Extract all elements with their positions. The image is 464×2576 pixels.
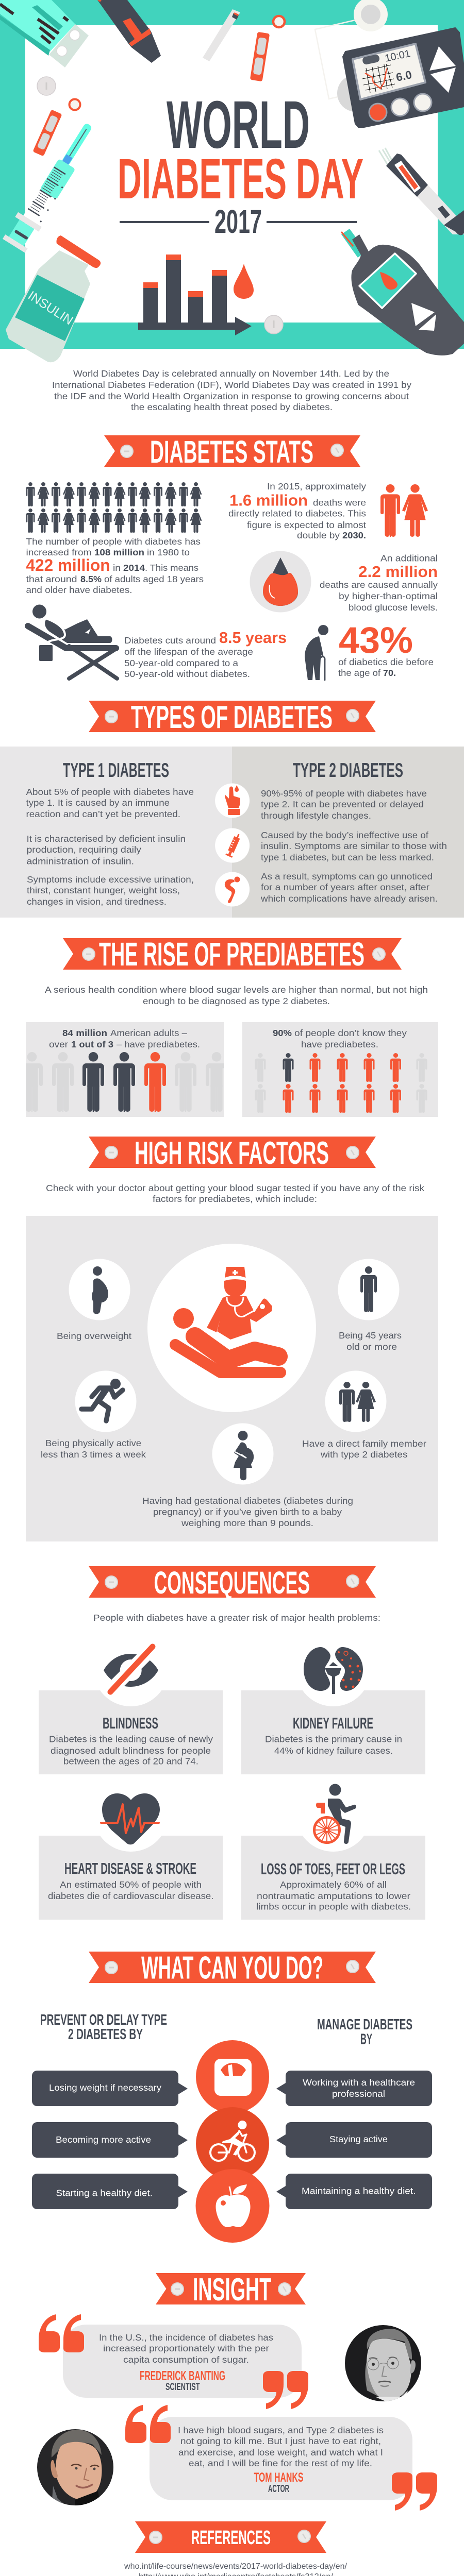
text: physically active <box>41 1438 146 1460</box>
text: heart disease <box>48 1879 213 1901</box>
callout: maintaining diet <box>276 2174 432 2209</box>
stat: 43 percent: 70. <box>383 668 396 678</box>
icon: meter with tape <box>315 0 464 127</box>
banner: diabetes stats: DIABETES STATS <box>150 434 313 469</box>
icon: fatigued figure <box>215 872 250 907</box>
banner: references <box>135 2521 326 2553</box>
icon: opening quote <box>39 2314 84 2352</box>
icon: overweight <box>69 1259 130 1320</box>
title <box>118 87 363 240</box>
text: hanks quote: and exercise, and lose weight, and watch what I <box>178 2447 383 2458</box>
banner: insight <box>156 2272 306 2308</box>
stat: 8.5 years: Diabetes cuts around <box>124 635 216 646</box>
icon: pen top <box>97 0 161 63</box>
text: gestational: pregnancy) or if you’ve given birth to a baby <box>153 1506 342 1517</box>
panel: 90 percent unaware <box>242 1022 438 1117</box>
text: type 1 description: It is characterised by deficient insulin <box>27 834 186 844</box>
stat: 2.2 million: 2.2 million <box>358 563 438 581</box>
icon: family <box>325 1370 387 1432</box>
text: 45 years: Being 45 years <box>339 1330 402 1341</box>
stat: 1.6 million: 1.6 million <box>229 492 308 509</box>
text: consequences intro: People with diabetes have a greater risk of major health problems: <box>93 1613 380 1623</box>
heading: heart disease: HEART DISEASE & STROKE <box>64 1860 196 1877</box>
card: blindness <box>39 1631 223 1774</box>
text: type 2 description: type 2. It can be prevented or delayed <box>261 799 424 809</box>
text: type 1 description: About 5% of people with diabetes have <box>26 787 194 797</box>
stat: 43 percent: 43% <box>339 620 413 661</box>
stat: 43 percent: the age of <box>338 668 380 678</box>
icon: doctor and patient <box>147 1244 316 1412</box>
text: hanks quote <box>178 2425 384 2468</box>
intro text: the IDF and the World Health Organization in response to growing concerns about <box>54 391 409 401</box>
stat: 2.2 million <box>320 553 438 613</box>
banner: high risk factors: HIGH RISK FACTORS <box>135 1136 329 1171</box>
icon: loose pill left <box>37 77 56 95</box>
icon: syringe <box>2 117 101 253</box>
intro text: World Diabetes Day is celebrated annually on November 14th. Led by the <box>73 368 389 379</box>
quote: frederick banting <box>39 2314 308 2409</box>
text: type 2 description <box>260 788 447 904</box>
intro text: International Diabetes Federation (IDF), World Diabetes Day was created in 1991 by <box>52 380 411 390</box>
text: blindness: Diabetes is the leading cause of newly <box>49 1734 213 1744</box>
icon: ring and lancet top <box>250 16 285 81</box>
text: prediabetes definition: A serious health condition where blood sugar levels are higher than normal, but not high <box>45 985 428 995</box>
stat: 2.2 million: blood glucose levels. <box>349 602 438 613</box>
stat: 422 million: The number of people with diabetes has <box>26 536 201 547</box>
text: loss of toes <box>256 1879 411 1911</box>
stat: 43 percent: of diabetics die before <box>338 657 434 667</box>
icon: closing quote <box>263 2371 308 2409</box>
text: type 2 description: insulin. Symptoms are similar to those with <box>261 841 447 851</box>
text: 84 million <box>49 1028 200 1049</box>
pictogram: 9 in 10 <box>255 1053 427 1113</box>
stat: 2.2 million: by higher-than-optimal <box>339 591 438 601</box>
callout: losing weight: Losing weight if necessary <box>49 2082 161 2093</box>
stat: 8.5 years <box>124 629 287 679</box>
title: WORLD <box>167 87 310 162</box>
text: 90 percent: of people don’t know they <box>294 1028 407 1038</box>
banner: insight: INSIGHT <box>193 2272 271 2308</box>
icon: syringe small <box>215 828 250 862</box>
text: prediabetes definition: enough to be diagnosed as type 2 diabetes. <box>143 996 330 1006</box>
text: type 2 description: for a number of years after onset, after <box>261 882 429 892</box>
icon: blood drop <box>250 551 311 612</box>
stat: 2.2 million: An additional <box>380 553 438 564</box>
heading: manage diabetes: MANAGE DIABETES <box>317 2016 412 2033</box>
icon: cyclist <box>196 2107 269 2180</box>
text: physically active: Being physically active <box>45 1438 141 1448</box>
text: gestational <box>142 1496 353 1528</box>
text: type 1 description: Symptoms include excessive urination, <box>27 874 194 885</box>
pictogram: 1 of 3 <box>21 1052 227 1112</box>
callouts: prevent column <box>32 2071 188 2209</box>
callout: healthcare professional: professional <box>332 2089 385 2099</box>
callout: healthy diet: Starting a healthy diet. <box>56 2188 153 2198</box>
panel: risk factors <box>26 1216 438 1541</box>
stat: 422 million: 422 million <box>26 556 110 574</box>
text: blindness <box>49 1734 213 1766</box>
text: overweight: Being overweight <box>57 1331 131 1341</box>
text: reference list <box>90 2562 380 2576</box>
text: banting quote: In the U.S., the incidence of diabetes has <box>99 2332 273 2343</box>
callout: healthcare professional <box>276 2071 432 2106</box>
text: blindness: diagnosed adult blindness for people <box>51 1745 211 1756</box>
text: loss of toes: Approximately 60% of all <box>280 1879 387 1890</box>
text: family: with type 2 diabetes <box>320 1449 408 1460</box>
stat: 43 percent <box>338 620 434 678</box>
text: 45 years <box>339 1330 402 1352</box>
callout: healthy diet <box>32 2174 188 2209</box>
banner: what can you do <box>89 1951 376 1986</box>
icon: heart with ECG <box>101 1793 160 1844</box>
text: hanks quote: I have high blood sugars, and Type 2 diabetes is <box>178 2425 384 2435</box>
callout: losing weight <box>32 2071 188 2106</box>
text: banting quote: increased proportionately with the per <box>103 2343 269 2353</box>
banner: consequences <box>89 1565 376 1600</box>
stat: 8.5 years: 8.5 years <box>219 629 287 647</box>
icon: pregnant woman <box>212 1423 273 1485</box>
stat: 1.6 million: figure is expected to almost <box>247 520 366 530</box>
text: loss of toes: nontraumatic amputations to lower <box>257 1891 410 1901</box>
attribution: banting <box>140 2368 225 2393</box>
stat: 422 million: 108 million <box>94 547 144 557</box>
text: type 1 description: thirst, constant hunger, weight loss, <box>27 885 180 895</box>
banner: diabetes stats <box>104 434 360 469</box>
icon: runner <box>75 1370 136 1432</box>
stat: 422 million: 8.5% <box>80 574 102 584</box>
stat: 1.6 million: 2030. <box>342 530 366 540</box>
text: reference list: who.int/life-course/news/events/2017-world-diabetes-day/en/ <box>124 2562 347 2571</box>
photo: frederick banting <box>345 2325 421 2401</box>
heading: manage diabetes <box>317 2016 412 2047</box>
intro text <box>52 368 411 412</box>
text: type 1 description: administration of insulin. <box>27 856 134 867</box>
heading: prevent or delay <box>40 2012 167 2043</box>
text: type 2 description: through lifestyle changes. <box>261 810 371 821</box>
text: prediabetes definition <box>45 985 428 1006</box>
attribution: hanks: TOM HANKS <box>254 2470 303 2485</box>
intro text: the escalating health threat posed by diabetes. <box>131 402 333 412</box>
heading: prevent or delay: PREVENT OR DELAY TYPE <box>40 2012 167 2028</box>
icon: wheelchair <box>314 1784 356 1844</box>
text: 90 percent: have prediabetes. <box>301 1039 378 1049</box>
icon: test strip <box>203 9 240 61</box>
stats: people pictogram <box>26 482 202 533</box>
text: family <box>302 1438 426 1460</box>
text: 84 million: American adults – <box>110 1028 187 1038</box>
stat: 422 million: in 1980 to <box>147 547 190 557</box>
text: 84 million: 84 million <box>62 1028 107 1038</box>
stat: 8.5 years: 50-year-old without diabetes. <box>124 669 250 679</box>
icon: ring and lancet left <box>32 99 80 156</box>
panel: type 2 diabetes <box>232 747 464 918</box>
text: hanks quote: eat, and I will be fine for the rest of my life. <box>189 2458 372 2468</box>
text: type 1 description <box>26 787 194 907</box>
text: risk intro: Check with your doctor about getting your blood sugar tested if you have any of the risk <box>46 1183 424 1193</box>
icon: closing quote <box>392 2472 437 2511</box>
text: type 2 description: which complications have already arisen. <box>260 893 438 904</box>
photo: tom hanks <box>37 2429 113 2506</box>
panel: 84 million adults <box>21 1022 227 1117</box>
callout: staying active: Staying active <box>329 2134 388 2144</box>
text: risk intro <box>46 1183 424 1204</box>
text: risk intro: factors for prediabetes, which include: <box>153 1194 317 1204</box>
banner: references: REFERENCES <box>191 2527 271 2549</box>
callout: staying active <box>276 2122 432 2158</box>
icon: weighing scale <box>196 2040 269 2113</box>
text: banting quote <box>99 2332 273 2365</box>
banner: types of diabetes <box>89 700 376 735</box>
stat: 422 million <box>26 536 204 595</box>
icon: insulin pen right <box>379 148 464 235</box>
icon: finger prick <box>215 783 250 818</box>
text: type 2 description: Caused by the body’s ineffective use of <box>261 830 428 840</box>
panel: type 1 diabetes <box>0 747 232 918</box>
header illustration <box>0 0 464 362</box>
callouts: manage column <box>276 2071 432 2209</box>
stat: 422 million: increased from <box>26 547 92 557</box>
icon: insulin bottle <box>6 235 101 362</box>
stat: 422 million: that around <box>26 574 77 584</box>
icon: insulin box with pills <box>0 0 89 67</box>
icon: orange couple <box>380 484 428 537</box>
icon: meter with tape: 10:01 <box>384 48 411 64</box>
heading: manage diabetes: BY <box>360 2031 372 2047</box>
attribution: hanks: ACTOR <box>268 2483 289 2495</box>
callout: more active: Becoming more active <box>56 2134 151 2145</box>
stat: 422 million: 2014 <box>123 563 145 573</box>
banner: consequences: CONSEQUENCES <box>154 1565 310 1600</box>
heading: prevent or delay: 2 DIABETES BY <box>68 2026 143 2043</box>
stat: 8.5 years: 50-year-old compared to a <box>124 658 238 668</box>
icon: insulin bottle: INSULIN <box>25 289 76 328</box>
banner: what can you do: WHAT CAN YOU DO? <box>141 1951 323 1986</box>
stat: 1.6 million <box>228 481 366 540</box>
icon: loose pill bottom <box>264 315 283 334</box>
stat: 422 million: in <box>113 563 121 573</box>
stat: 422 million: . This means <box>145 563 198 573</box>
stat: 8.5 years: off the lifespan of the average <box>124 647 253 657</box>
text: heart disease: diabetes die of cardiovascular disease. <box>48 1891 213 1901</box>
stat: 1.6 million: directly related to diabetes. This <box>228 508 366 518</box>
heading: kidney failure: KIDNEY FAILURE <box>293 1715 373 1732</box>
icon: meter with tape: 6.0 <box>395 68 413 84</box>
text: type 2 description: type 1 diabetes, but can be less marked. <box>261 852 434 862</box>
text: 45 years: old or more <box>346 1342 397 1352</box>
quote: tom hanks <box>125 2405 437 2511</box>
text: type 1 description: production, requiring daily <box>27 844 141 855</box>
text: physically active: less than 3 times a week <box>41 1449 146 1460</box>
icon: opening quote <box>125 2405 171 2443</box>
icon: 45 years <box>338 1259 399 1320</box>
heading: type 1: TYPE 1 DIABETES <box>63 759 169 782</box>
icon: bar chart with drop <box>138 255 254 335</box>
text: blindness: between the ages of 20 and 74. <box>63 1756 198 1766</box>
stat: 1.6 million: double by <box>297 530 340 540</box>
text: family: Have a direct family member <box>302 1438 426 1449</box>
card: loss of toes <box>241 1776 425 1920</box>
text: kidney failure: Diabetes is the primary cause in <box>265 1734 402 1744</box>
text: gestational: weighing more than 9 pounds. <box>181 1518 313 1528</box>
text: 84 million: 1 out of 3 <box>71 1039 113 1049</box>
stat: 1.6 million: deaths were <box>313 498 366 508</box>
stat: 1.6 million: In 2015, approximately <box>267 481 366 492</box>
banner: high risk factors <box>89 1136 376 1171</box>
callout: maintaining diet: Maintaining a healthy diet. <box>302 2185 416 2196</box>
stat: 422 million: of adults aged 18 years <box>104 574 204 584</box>
callout: more active <box>32 2122 188 2158</box>
stat: 2.2 million: deaths are caused annually <box>320 580 438 590</box>
card: kidney failure <box>241 1631 425 1774</box>
icon: glucose meter bottom right <box>341 229 464 355</box>
icon: kidneys <box>304 1647 363 1694</box>
text: 90 percent: 90% <box>273 1028 292 1038</box>
attribution: banting: FREDERICK BANTING <box>140 2368 225 2383</box>
text: hanks quote: not going to kill me. But I just have to eat right, <box>180 2436 381 2446</box>
icon: apple <box>196 2169 269 2243</box>
callout: healthcare professional: Working with a healthcare <box>303 2077 415 2088</box>
icon: elderly person with cane <box>305 625 328 680</box>
text: 84 million: over <box>49 1039 68 1049</box>
attribution: banting: SCIENTIST <box>165 2382 200 2393</box>
text: 84 million: – have prediabetes. <box>117 1039 200 1049</box>
text: type 1 description: reaction and can’t yet be prevented. <box>26 809 180 819</box>
title: 2017 <box>214 203 262 240</box>
text: type 2 description: 90%-95% of people with diabetes have <box>261 788 427 799</box>
card: heart disease <box>39 1776 223 1920</box>
stat: 422 million: and older have diabetes. <box>26 585 132 595</box>
text: kidney failure: 44% of kidney failure cases. <box>274 1745 393 1756</box>
attribution: hanks <box>254 2470 303 2495</box>
text: heart disease: An estimated 50% of people with <box>60 1879 202 1890</box>
text: kidney failure <box>265 1734 402 1756</box>
text: type 1 description: changes in vision, and tiredness. <box>27 896 167 907</box>
icon: crossed eye <box>104 1646 158 1694</box>
text: banting quote: capita consumption of sugar. <box>123 2354 249 2365</box>
icon: patient on bed <box>28 605 117 679</box>
text: loss of toes: limbs occur in people with diabetes. <box>256 1901 411 1911</box>
text: gestational: Having had gestational diabetes (diabetes during <box>142 1496 353 1506</box>
text: 90 percent <box>273 1028 407 1049</box>
text: type 2 description: As a result, symptoms can go unnoticed <box>261 871 433 882</box>
text: type 1 description: type 1. It is caused by an immune <box>26 798 170 808</box>
banner: types of diabetes: TYPES OF DIABETES <box>131 700 333 735</box>
heading: blindness: BLINDNESS <box>103 1715 158 1732</box>
